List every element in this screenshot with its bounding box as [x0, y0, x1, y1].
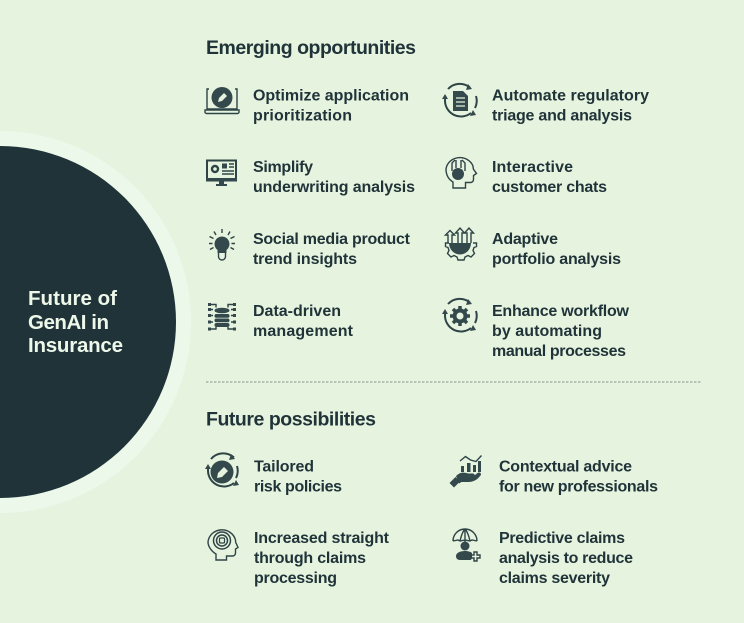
- icon: laptop with pen: [205, 87, 239, 114]
- icon: pen in cycle arrows: [205, 453, 239, 487]
- item: Enhance workflow by automating manual processes: [442, 299, 630, 360]
- item: Simplify underwriting analysis: Simplify: [253, 159, 313, 176]
- icon: head with headset: [446, 158, 476, 188]
- item: Tailored risk policies: Tailored: [254, 458, 314, 476]
- item: Increased straight through claims processing: processing: [254, 570, 337, 587]
- heading: Emerging opportunities: Emerging opportunities: [206, 37, 416, 59]
- icon: gear in cycle arrows: [442, 299, 477, 332]
- icon: hand holding chart: [450, 456, 482, 488]
- central circle with title: [0, 131, 191, 513]
- item: Optimize application prioritization: prioritization: [253, 108, 352, 124]
- title: Future of GenAI in Insurance: Future of: [28, 287, 117, 310]
- item: Predictive claims analysis to reduce claims severity: claims severity: [499, 570, 610, 587]
- item: Automate regulatory triage and analysis: triage and analysis: [492, 108, 632, 124]
- item: Enhance workflow by automating manual processes: manual processes: [492, 343, 626, 360]
- item: Interactive customer chats: customer chats: [492, 179, 607, 196]
- item: Adaptive portfolio analysis: [446, 228, 621, 268]
- icon: monitor with settings: [206, 160, 237, 186]
- item: Predictive claims analysis to reduce claims severity: [453, 529, 633, 587]
- item: Contextual advice for new professionals: for new professionals: [499, 478, 658, 496]
- item: Enhance workflow by automating manual processes: Enhance workflow: [492, 303, 630, 320]
- item: Contextual advice for new professionals: [450, 456, 658, 496]
- item: Automate regulatory triage and analysis: [442, 84, 649, 124]
- icon: head with target: [208, 530, 238, 560]
- item: Social media product trend insights: trend insights: [253, 251, 357, 268]
- title: Future of GenAI in Insurance: [28, 287, 123, 357]
- item: Social media product trend insights: [209, 229, 411, 268]
- item: Data-driven management: management: [253, 323, 354, 340]
- item: Enhance workflow by automating manual processes: by automating: [492, 323, 602, 340]
- icon: document in cycle arrows: [442, 84, 477, 117]
- icon: gear with arrows: [446, 228, 476, 260]
- icon: umbrella over person: [453, 529, 480, 561]
- item: Simplify underwriting analysis: [206, 159, 415, 196]
- item: Increased straight through claims processing: Increased straight: [254, 530, 390, 547]
- item: Increased straight through claims processing: [208, 530, 390, 587]
- item: Increased straight through claims processing: through claims: [254, 550, 366, 567]
- item: Interactive customer chats: [446, 158, 607, 196]
- item: Tailored risk policies: [205, 453, 342, 496]
- item: Automate regulatory triage and analysis: Automate regulatory: [492, 88, 649, 104]
- item: Tailored risk policies: risk policies: [254, 478, 342, 496]
- title: Future of GenAI in Insurance: GenAI in: [28, 311, 109, 334]
- item: Predictive claims analysis to reduce claims severity: analysis to reduce: [499, 550, 633, 567]
- item: Data-driven management: [208, 303, 354, 340]
- item: Simplify underwriting analysis: underwriting analysis: [253, 179, 415, 196]
- icon: database network: [208, 303, 236, 330]
- heading: Future possibilities: Future possibilities: [206, 408, 376, 430]
- title: Future of GenAI in Insurance: Insurance: [28, 334, 123, 357]
- icon: light bulb: [209, 229, 235, 260]
- item: Interactive customer chats: Interactive: [492, 159, 573, 176]
- item: Optimize application prioritization: Optimize application: [253, 88, 409, 104]
- item: Optimize application prioritization: [205, 87, 409, 124]
- item: Contextual advice for new professionals: Contextual advice: [499, 458, 632, 476]
- item: Predictive claims analysis to reduce claims severity: Predictive claims: [499, 530, 625, 547]
- item: Social media product trend insights: Social media product: [253, 231, 411, 248]
- item: Adaptive portfolio analysis: Adaptive: [492, 231, 558, 248]
- item: Data-driven management: Data-driven: [253, 303, 341, 320]
- item: Adaptive portfolio analysis: portfolio analysis: [492, 251, 621, 268]
